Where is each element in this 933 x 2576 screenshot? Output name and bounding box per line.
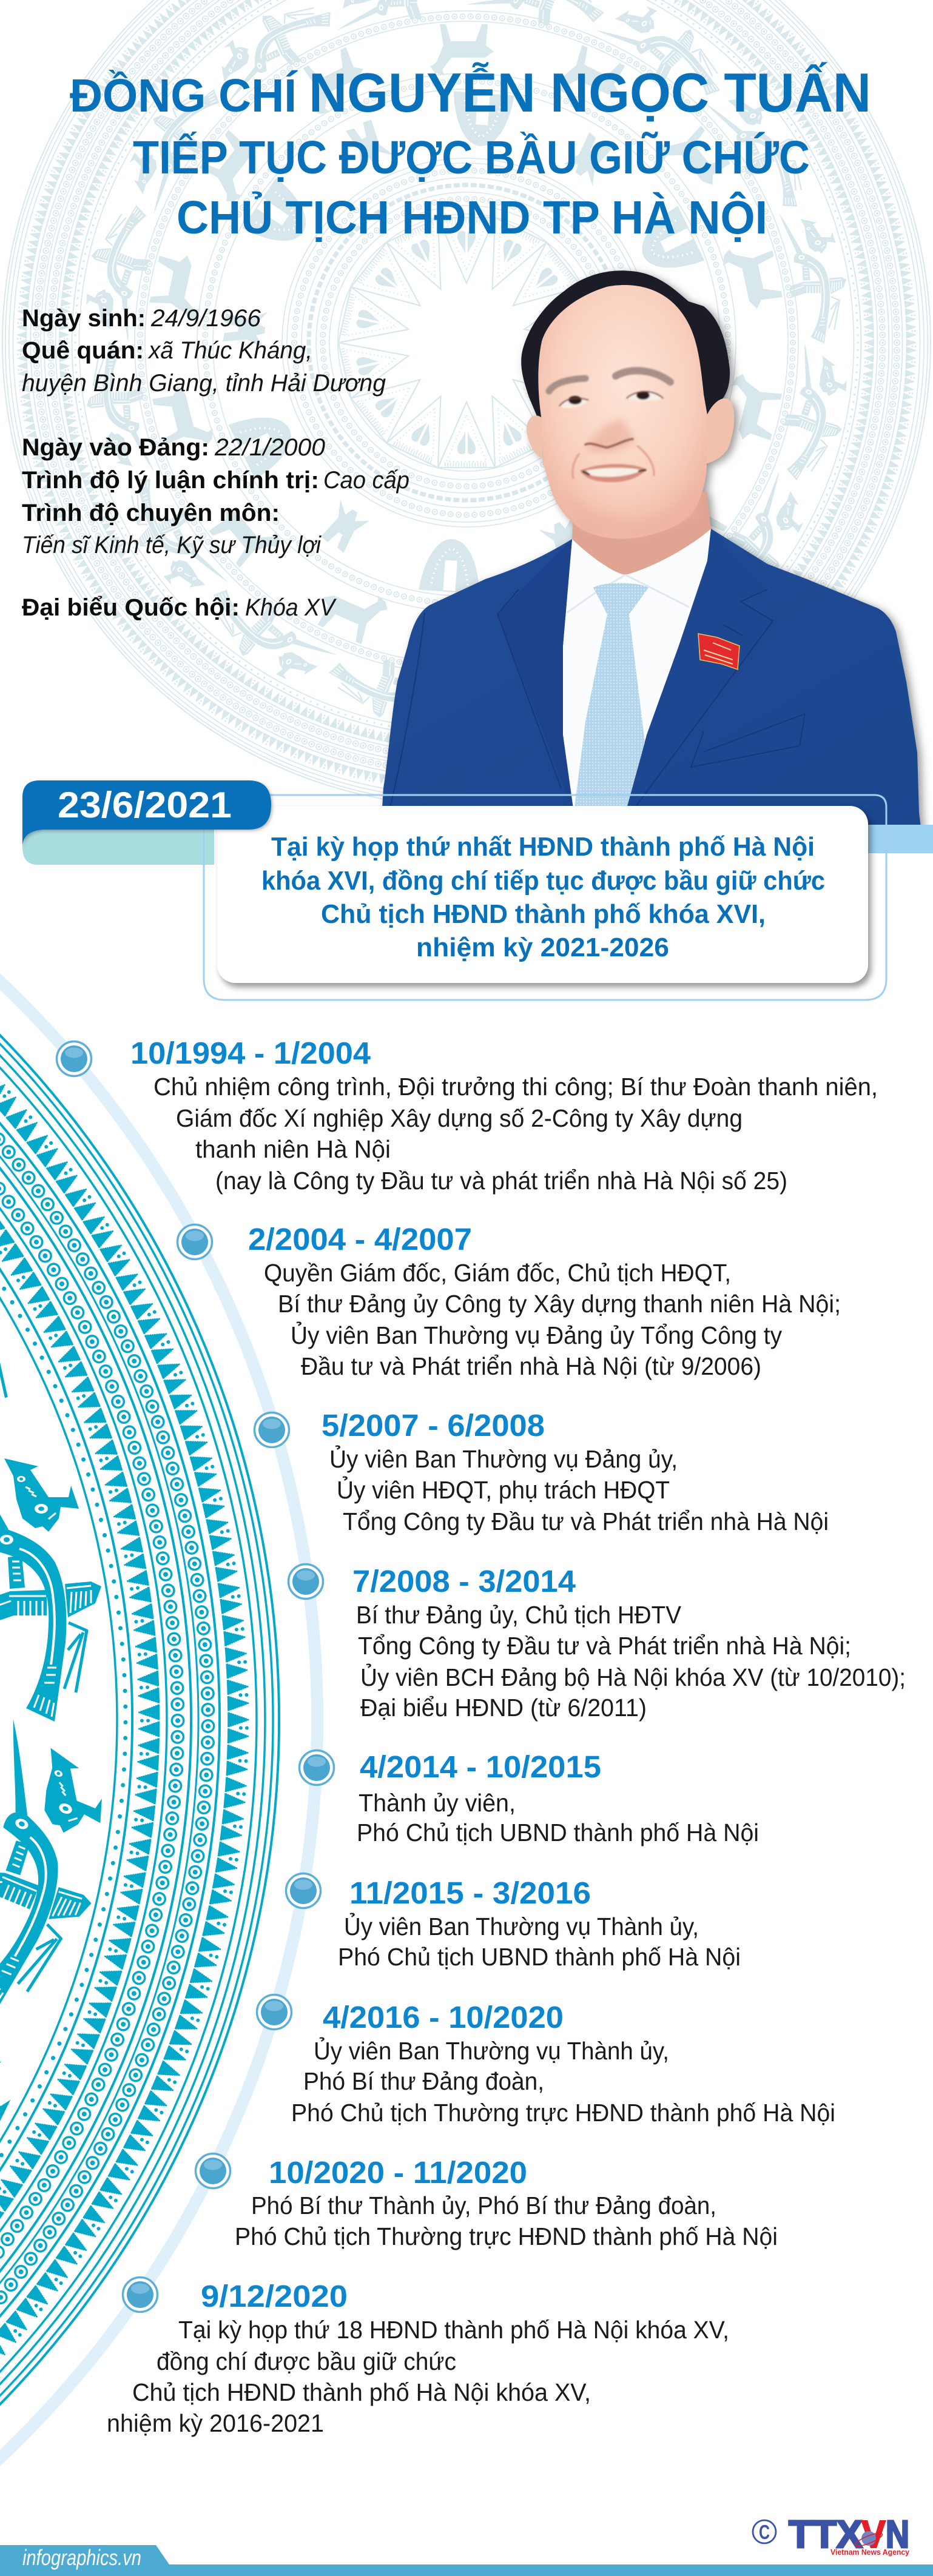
timeline item 2 bbox=[177, 1222, 841, 1380]
bronze drum decoration: bottom left bbox=[0, 970, 279, 2470]
personal information: Trình độ chuyên môn: bbox=[22, 500, 280, 526]
timeline item 7: Phó Chủ tịch Thường trực HĐND thành phố Hà Nội bbox=[291, 2099, 835, 2127]
timeline item 6: Ủy viên Ban Thường vụ Thành ủy, bbox=[344, 1913, 699, 1940]
timeline item 9 bbox=[107, 2278, 729, 2437]
hair bbox=[521, 270, 730, 428]
party badge bbox=[698, 634, 739, 669]
timeline item 8 bbox=[195, 2154, 778, 2250]
timeline item 2: Đầu tư và Phát triển nhà Hà Nội (từ 9/2006) bbox=[301, 1352, 761, 1380]
personal information: Ngày vào Đảng: bbox=[22, 434, 209, 461]
personal information: Cao cấp bbox=[323, 467, 409, 494]
facial shading bbox=[586, 418, 635, 455]
timeline item 5: 4/2014 - 10/2015 bbox=[360, 1749, 601, 1784]
personal information: Tiến sĩ Kinh tế, Kỹ sư Thủy lợi bbox=[22, 532, 322, 558]
tie bbox=[574, 583, 648, 813]
timeline item 4: Ủy viên BCH Đảng bộ Hà Nội khóa XV (từ 10/2010); bbox=[360, 1663, 906, 1691]
timeline item 5 bbox=[300, 1749, 759, 1846]
banner right tab bbox=[868, 825, 933, 853]
banner card: Chủ tịch HĐND thành phố khóa XVI, bbox=[321, 899, 766, 929]
neck bbox=[572, 491, 711, 576]
timeline item 4: Đại biểu HĐND (từ 6/2011) bbox=[360, 1694, 647, 1722]
timeline item 2: Quyền Giám đốc, Giám đốc, Chủ tịch HĐQT, bbox=[264, 1259, 731, 1287]
banner outline frame bbox=[204, 795, 886, 1000]
timeline item 3: Tổng Công ty Đầu tư và Phát triển nhà Hà Nội bbox=[343, 1508, 829, 1535]
banner teal ribbon bbox=[22, 830, 214, 865]
timeline item 1: Chủ nhiệm công trình, Đội trưởng thi công; Bí thư Đoàn thanh niên, bbox=[153, 1073, 878, 1101]
timeline item 4 bbox=[289, 1564, 906, 1722]
timeline item 9: Chủ tịch HĐND thành phố Hà Nội khóa XV, bbox=[132, 2378, 591, 2406]
logo: TTXVN: Vietnam News Agency bbox=[830, 2548, 909, 2557]
timeline item 1: (nay là Công ty Đầu tư và phát triển nhà Hà Nội số 25) bbox=[215, 1167, 787, 1195]
personal information: 22/1/2000 bbox=[214, 434, 325, 461]
timeline item 1: thanh niên Hà Nội bbox=[195, 1135, 391, 1163]
personal information: Quê quán: bbox=[22, 337, 144, 364]
left ear bbox=[527, 415, 543, 459]
title bbox=[70, 62, 871, 244]
timeline item 1: 10/1994 - 1/2004 bbox=[130, 1036, 371, 1070]
timeline item 8: 10/2020 - 11/2020 bbox=[269, 2155, 527, 2190]
personal information: Trình độ lý luận chính trị: bbox=[22, 467, 319, 494]
timeline item 6 bbox=[286, 1874, 741, 1971]
timeline item 7: Ủy viên Ban Thường vụ Thành ủy, bbox=[314, 2037, 669, 2065]
title: ĐỒNG CHÍ bbox=[70, 70, 298, 122]
timeline item 5: Phó Chủ tịch UBND thành phố Hà Nội bbox=[357, 1819, 759, 1846]
banner card: nhiệm kỳ 2021-2026 bbox=[416, 933, 669, 962]
personal information: xã Thúc Kháng, bbox=[147, 337, 312, 364]
timeline item 2: Ủy viên Ban Thường vụ Đảng ủy Tổng Công ty bbox=[291, 1321, 782, 1349]
banner date tab: 23/6/2021 bbox=[58, 785, 232, 825]
facial features bbox=[549, 371, 670, 482]
portrait photo bbox=[381, 270, 921, 828]
timeline item 3: 5/2007 - 6/2008 bbox=[322, 1408, 545, 1443]
timeline item 4: Tổng Công ty Đầu tư và Phát triển nhà Hà Nội; bbox=[358, 1632, 851, 1660]
right lapel bbox=[646, 529, 711, 737]
personal information: 24/9/1966 bbox=[150, 305, 261, 332]
timeline item 7 bbox=[257, 1995, 835, 2127]
face bbox=[538, 285, 708, 538]
timeline item 2: 2/2004 - 4/2007 bbox=[248, 1222, 472, 1256]
collar shading bbox=[567, 575, 689, 612]
jacket bbox=[381, 529, 921, 828]
footer bar: infographics.vn bbox=[22, 2545, 141, 2570]
timeline item 1: Giám đốc Xí nghiệp Xây dựng số 2-Công ty Xây dựng bbox=[176, 1104, 743, 1132]
timeline item 2: Bí thư Đảng ủy Công ty Xây dựng thanh niên Hà Nội; bbox=[278, 1290, 841, 1318]
timeline item 7: 4/2016 - 10/2020 bbox=[323, 2000, 564, 2034]
logo: TTXVN: N bbox=[886, 2512, 909, 2556]
timeline item 6: 11/2015 - 3/2016 bbox=[349, 1876, 591, 1910]
timeline item 9: nhiệm kỳ 2016-2021 bbox=[107, 2409, 324, 2437]
left lapel bbox=[499, 539, 572, 771]
shirt bbox=[563, 529, 711, 813]
timeline item 9: 9/12/2020 bbox=[201, 2279, 348, 2313]
timeline item 6: Phó Chủ tịch UBND thành phố Hà Nội bbox=[338, 1943, 741, 1971]
logo: TTXVN: V bbox=[861, 2512, 886, 2556]
timeline item 5: Thành ủy viên, bbox=[359, 1789, 516, 1817]
logo: TTXVN: C bbox=[759, 2521, 770, 2543]
timeline item 4: Bí thư Đảng ủy, Chủ tịch HĐTV bbox=[356, 1601, 682, 1629]
logo: TTXVN: TTX bbox=[789, 2512, 863, 2556]
personal information: Khóa XV bbox=[245, 594, 337, 621]
timeline item 9: đồng chí được bầu giữ chức bbox=[157, 2347, 456, 2375]
timeline item 8: Phó Chủ tịch Thường trực HĐND thành phố Hà Nội bbox=[235, 2222, 778, 2250]
timeline item 9: Tại kỳ họp thứ 18 HĐND thành phố Hà Nội khóa XV, bbox=[178, 2316, 729, 2344]
timeline arc band bbox=[0, 970, 317, 2469]
timeline item 3: Ủy viên Ban Thường vụ Đảng ủy, bbox=[329, 1445, 678, 1473]
footer bar bbox=[0, 2545, 933, 2576]
timeline item 3: Ủy viên HĐQT, phụ trách HĐQT bbox=[337, 1476, 670, 1504]
title: NGUYỄN NGỌC TUẤN bbox=[309, 62, 871, 124]
title: TIẾP TỤC ĐƯỢC BẦU GIỮ CHỨC bbox=[133, 131, 810, 184]
lapel and pocket seams bbox=[388, 589, 805, 816]
banner card bbox=[217, 806, 868, 983]
personal information bbox=[22, 305, 409, 621]
banner card: khóa XVI, đồng chí tiếp tục được bầu giữ chức bbox=[261, 866, 825, 896]
banner date tab bbox=[22, 780, 271, 847]
timeline item 8: Phó Bí thư Thành ủy, Phó Bí thư Đảng đoàn, bbox=[251, 2192, 716, 2219]
personal information: Ngày sinh: bbox=[22, 305, 146, 332]
timeline item 4: 7/2008 - 3/2014 bbox=[352, 1564, 576, 1598]
logo: TTXVN bbox=[753, 2512, 909, 2557]
personal information: huyện Bình Giang, tỉnh Hải Dương bbox=[22, 370, 386, 397]
title: CHỦ TỊCH HĐND TP HÀ NỘI bbox=[177, 191, 767, 244]
banner card: Tại kỳ họp thứ nhất HĐND thành phố Hà Nội bbox=[271, 832, 815, 862]
timeline item 3 bbox=[255, 1408, 829, 1535]
right ear bbox=[706, 398, 734, 464]
personal information: Đại biểu Quốc hội: bbox=[22, 594, 240, 621]
timeline item 1 bbox=[57, 1036, 878, 1195]
timeline item 7: Phó Bí thư Đảng đoàn, bbox=[303, 2067, 544, 2095]
background drum pattern: top bbox=[2, 0, 931, 807]
